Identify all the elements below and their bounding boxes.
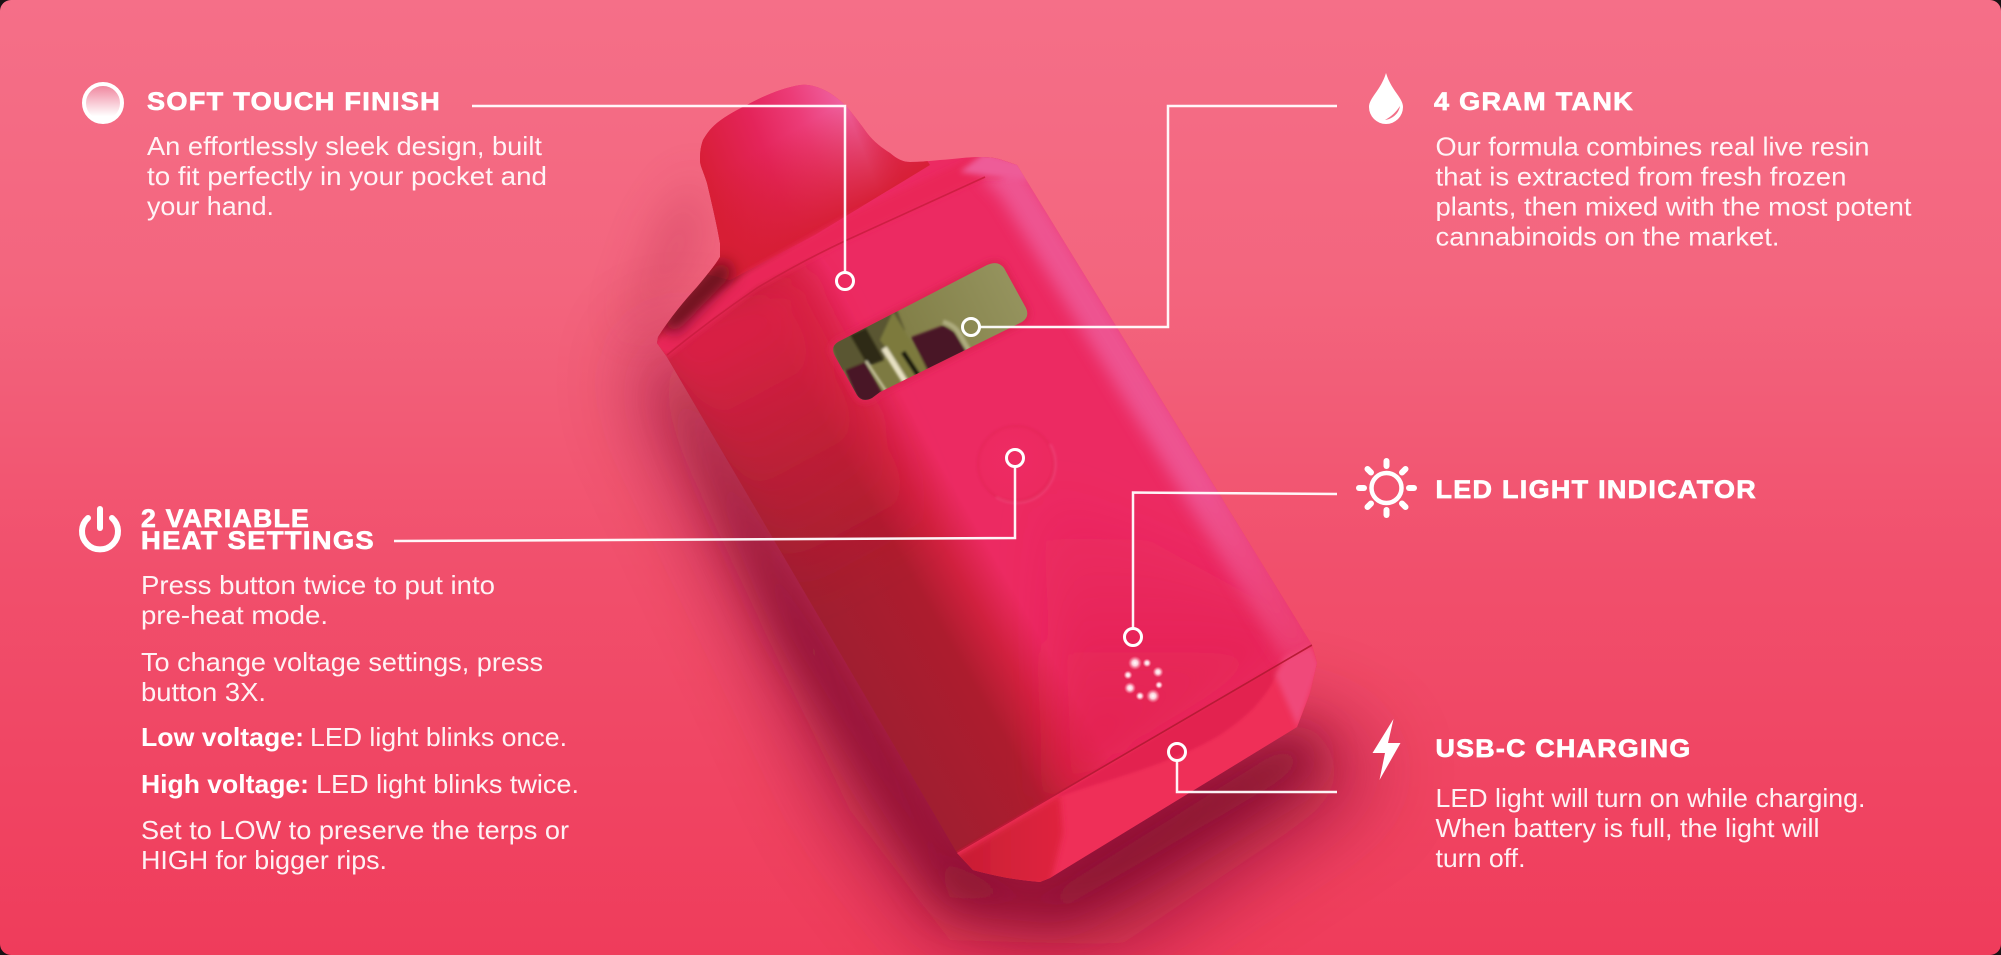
body: 4 gram tank (1436, 132, 1912, 252)
body: heat settings: High voltage: (141, 769, 309, 799)
icon: soft touch sphere (84, 84, 122, 122)
LED light ring (1124, 656, 1164, 703)
icon: lightning bolt (1372, 719, 1400, 780)
body: heat settings: Set to LOW to preserve the terps or (141, 815, 569, 845)
icon: water drop (1369, 73, 1403, 124)
body: soft touch finish: your hand. (147, 191, 274, 221)
body: heat settings: LED light blinks twice. (316, 769, 579, 799)
body: 4 gram tank: cannabinoids on the market. (1436, 222, 1780, 252)
leader: LED indicator (1124, 492, 1337, 646)
panel: heat settings (82, 505, 579, 875)
icon: sun (1359, 461, 1414, 515)
body: USB-C charging (1436, 788, 1863, 868)
panel: USB-C charging (1372, 719, 1866, 873)
panel: 4 gram tank (1369, 73, 1912, 252)
leader: heat settings (394, 450, 1024, 541)
body: USB-C charging: LED light will turn on while charging. (1436, 783, 1866, 813)
body: USB-C charging: When battery is full, the light will (1436, 813, 1820, 843)
leader: soft touch finish (472, 106, 854, 290)
icon: power symbol (82, 509, 118, 549)
device drop shadow (625, 170, 1380, 945)
ridge line (667, 177, 985, 355)
dark base shadow (668, 266, 728, 328)
heading: 2 variable heat settings: HEAT SETTINGS (141, 527, 375, 555)
heading: LED light indicator: LED LIGHT INDICATOR (1436, 476, 1757, 504)
body: soft touch finish: to fit perfectly in your pocket and (147, 161, 547, 191)
cartridge window (830, 263, 1027, 405)
body: heat settings: HIGH for bigger rips. (141, 845, 387, 875)
body: heat settings: Press button twice to put into (141, 570, 495, 600)
leader: USB-C charging (1168, 744, 1337, 792)
body: 4 gram tank: that is extracted from fresh frozen (1436, 162, 1846, 192)
body: 4 gram tank: plants, then mixed with the most potent (1436, 192, 1912, 222)
bottom cap (950, 645, 1325, 890)
body: 4 gram tank: Our formula combines real live resin (1436, 132, 1870, 162)
body: heat settings (141, 570, 579, 875)
heading: soft touch finish: SOFT TOUCH FINISH (147, 88, 441, 116)
body: heat settings: To change voltage settings, press (141, 647, 543, 677)
heading: 2 variable heat settings: 2 VARIABLE (141, 505, 310, 533)
body: heat settings: pre-heat mode. (141, 600, 328, 630)
right pink facet (980, 160, 1325, 660)
shoulder band (650, 152, 1020, 357)
power button (996, 444, 1056, 504)
body: soft touch finish (147, 131, 547, 221)
body: USB-C charging: turn off. (1436, 843, 1526, 873)
heading: 2 variable heat settings (142, 508, 373, 550)
body: heat settings: LED light blinks once. (310, 722, 567, 752)
body: heat settings: Low voltage: (141, 722, 304, 752)
device illustration (625, 70, 1380, 945)
body: heat settings: button 3X. (141, 677, 266, 707)
panel: soft touch finish (84, 84, 547, 221)
panel: LED light indicator (1359, 461, 1757, 515)
heading: USB-C charging: USB-C CHARGING (1436, 735, 1692, 763)
device body (657, 84, 1317, 882)
mouthpiece (700, 84, 892, 274)
body: soft touch finish: An effortlessly sleek design, built (147, 131, 543, 161)
leader: 4 gram tank (962, 106, 1337, 336)
heading: 4 gram tank: 4 GRAM TANK (1434, 88, 1634, 116)
